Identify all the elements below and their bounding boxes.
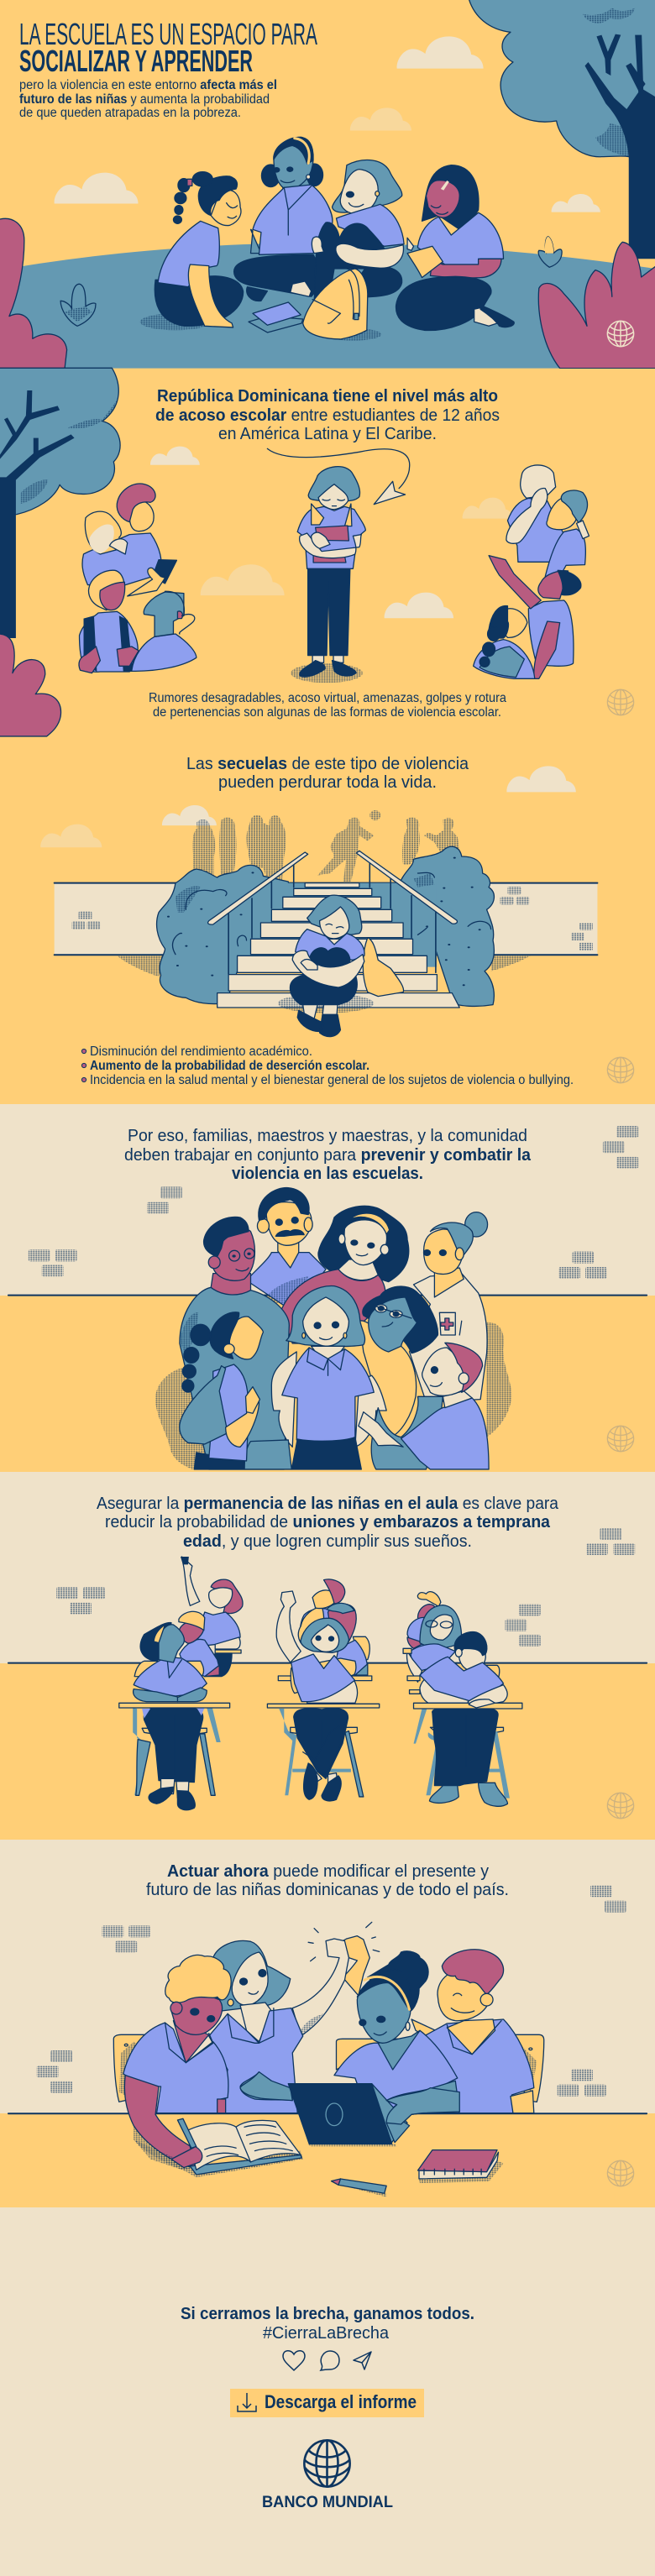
intro text: futuro de las niñas y aumenta la probabilidad — [19, 92, 270, 107]
icon: heart — [283, 2351, 305, 2370]
intro text: pero la violencia en este entorno afecta más el — [19, 78, 277, 92]
boy with pink hair — [359, 1343, 489, 1469]
girl hugging knees — [312, 160, 404, 313]
classmates group right — [474, 465, 589, 678]
key finding: República Dominicana tiene el nivel más alto — [157, 386, 498, 406]
intro text: de que queden atrapadas en la pobreza. — [19, 106, 241, 120]
back row, left column — [179, 1557, 243, 1677]
woman with headband — [280, 1206, 409, 1343]
girl reading a book — [396, 165, 514, 330]
paper plane — [374, 481, 406, 505]
backpack — [363, 938, 404, 997]
table — [0, 2113, 655, 2207]
back row, right column — [403, 1592, 462, 1694]
girl with blue hair — [209, 1939, 348, 2113]
icon: globe watermark — [607, 2160, 634, 2186]
panel: footer call to action — [181, 2304, 474, 2511]
panel: consequences — [40, 754, 634, 1087]
pencil — [332, 2179, 386, 2197]
heading: deben trabajar en conjunto para prevenir y combatir la — [124, 1145, 532, 1165]
bullied girl with books — [267, 448, 410, 683]
panel background — [0, 369, 655, 1104]
girl raising hand at middle desk — [267, 1591, 380, 1801]
girl at left desk — [119, 1623, 230, 1810]
laptop — [288, 2084, 459, 2147]
panel: families and teachers — [0, 1104, 655, 1472]
heading: Asegurar la permanencia de las niñas en el aula es clave para — [97, 1494, 559, 1513]
logo: World Bank globe — [304, 2440, 350, 2487]
list of consequences: Aumento de la probabilidad de deserción escolar. — [90, 1059, 369, 1073]
subheading: SOCIALIZAR Y APRENDER — [19, 44, 253, 78]
heading — [146, 1861, 509, 1899]
boy at right desk — [414, 1632, 522, 1806]
heading: Por eso, familias, maestros y maestras, y la comunidad — [128, 1126, 527, 1145]
panel background — [0, 1104, 655, 1472]
icon: globe watermark — [607, 1793, 634, 1819]
panel: acting now — [0, 1840, 655, 2207]
heading: edad, y que logren cumplir sus sueños. — [183, 1531, 472, 1551]
icon: globe watermark — [607, 321, 634, 347]
nurse — [410, 1212, 488, 1402]
list of consequences: Disminución del rendimiento académico. — [90, 1045, 312, 1059]
heading: pueden perdurar toda la vida. — [218, 772, 437, 792]
man with mustache — [247, 1188, 326, 1306]
heading: Las secuelas de este tipo de violencia — [186, 754, 469, 773]
girl with blue hair — [271, 1286, 386, 1469]
icon: globe watermark — [607, 1057, 634, 1083]
illustration: students high five — [8, 1885, 647, 2197]
icon: globe watermark — [607, 689, 634, 715]
heading: violencia en las escuelas. — [232, 1164, 423, 1183]
heading — [186, 754, 469, 792]
teal arm — [240, 2072, 292, 2101]
heading — [97, 1494, 559, 1551]
intro text — [19, 78, 277, 120]
illustration: classroom desks — [8, 1528, 647, 1810]
sad girl — [290, 895, 364, 1037]
man with glasses — [180, 1217, 289, 1469]
heading: Actuar ahora puede modificar el presente y — [167, 1861, 490, 1881]
open book and pencil — [134, 2118, 303, 2177]
hashtag: #CierraLaBrecha — [263, 2323, 390, 2343]
caption: Rumores desagradables, acoso virtual, amenazas, golpes y rotura — [149, 691, 506, 705]
illustration: girl bullied by classmates — [0, 368, 589, 736]
caption — [149, 691, 506, 720]
list of consequences — [81, 1045, 574, 1087]
books — [249, 302, 303, 332]
panel: keeping girls in the classroom — [0, 1472, 655, 1840]
key finding: en América Latina y El Caribe. — [218, 424, 437, 443]
illustration: four girls in the park — [0, 0, 655, 369]
heading — [124, 1126, 532, 1183]
key finding — [155, 386, 500, 443]
heading: LA ESCUELA ES UN ESPACIO PARA — [19, 17, 317, 51]
icon: globe watermark — [607, 1426, 634, 1452]
wall — [55, 883, 597, 955]
closing statement: Si cerramos la brecha, ganamos todos. — [181, 2304, 474, 2323]
illustration: community group — [8, 1126, 647, 1469]
girl with headband — [234, 137, 333, 301]
spiral notebook — [418, 2150, 503, 2183]
backpack — [303, 269, 381, 341]
floor — [0, 1296, 655, 1472]
download button — [230, 2389, 424, 2417]
panel: school as a space to socialize — [0, 0, 655, 369]
girl with hair bun — [334, 1951, 459, 2124]
silhouettes of students — [192, 815, 459, 882]
stairs — [217, 883, 459, 1008]
heading: futuro de las niñas dominicanas y de todo el país. — [146, 1880, 509, 1899]
girl with braid — [140, 172, 244, 330]
logo wordmark: BANCO MUNDIAL — [262, 2494, 393, 2511]
handrails — [208, 851, 457, 974]
chairs — [113, 2034, 544, 2102]
icon: send — [354, 2352, 371, 2369]
panel: bullying in Dominican Republic — [0, 368, 655, 1104]
bushes and small plants — [0, 218, 67, 369]
panel background — [0, 0, 655, 369]
caption: de pertenencias son algunas de las formas de violencia escolar. — [153, 705, 501, 720]
key finding: de acoso escolar entre estudiantes de 12 años — [155, 406, 500, 425]
download button: Descarga el informe — [265, 2391, 417, 2412]
classmates group left — [79, 484, 196, 673]
girl with backpack — [180, 1312, 291, 1469]
floor — [0, 1663, 655, 1840]
icon: speech bubble — [321, 2351, 339, 2370]
panel background — [0, 1472, 655, 1663]
illustration: girl on school steps — [40, 766, 597, 1037]
boy with pink hair — [343, 1936, 534, 2113]
high five sparks — [308, 1922, 380, 1961]
list of consequences: Incidencia en la salud mental y el bienestar general de los sujetos de violencia o bullying. — [90, 1073, 574, 1087]
girl with curly hair — [123, 1955, 231, 2170]
heading: reducir la probabilidad de uniones y embarazos a temprana — [105, 1512, 551, 1531]
icon: download — [238, 2393, 256, 2411]
woman with glasses — [359, 1286, 438, 1437]
panel background — [0, 1840, 655, 2113]
bushes — [157, 865, 291, 1004]
back row, middle column — [278, 1579, 372, 1681]
